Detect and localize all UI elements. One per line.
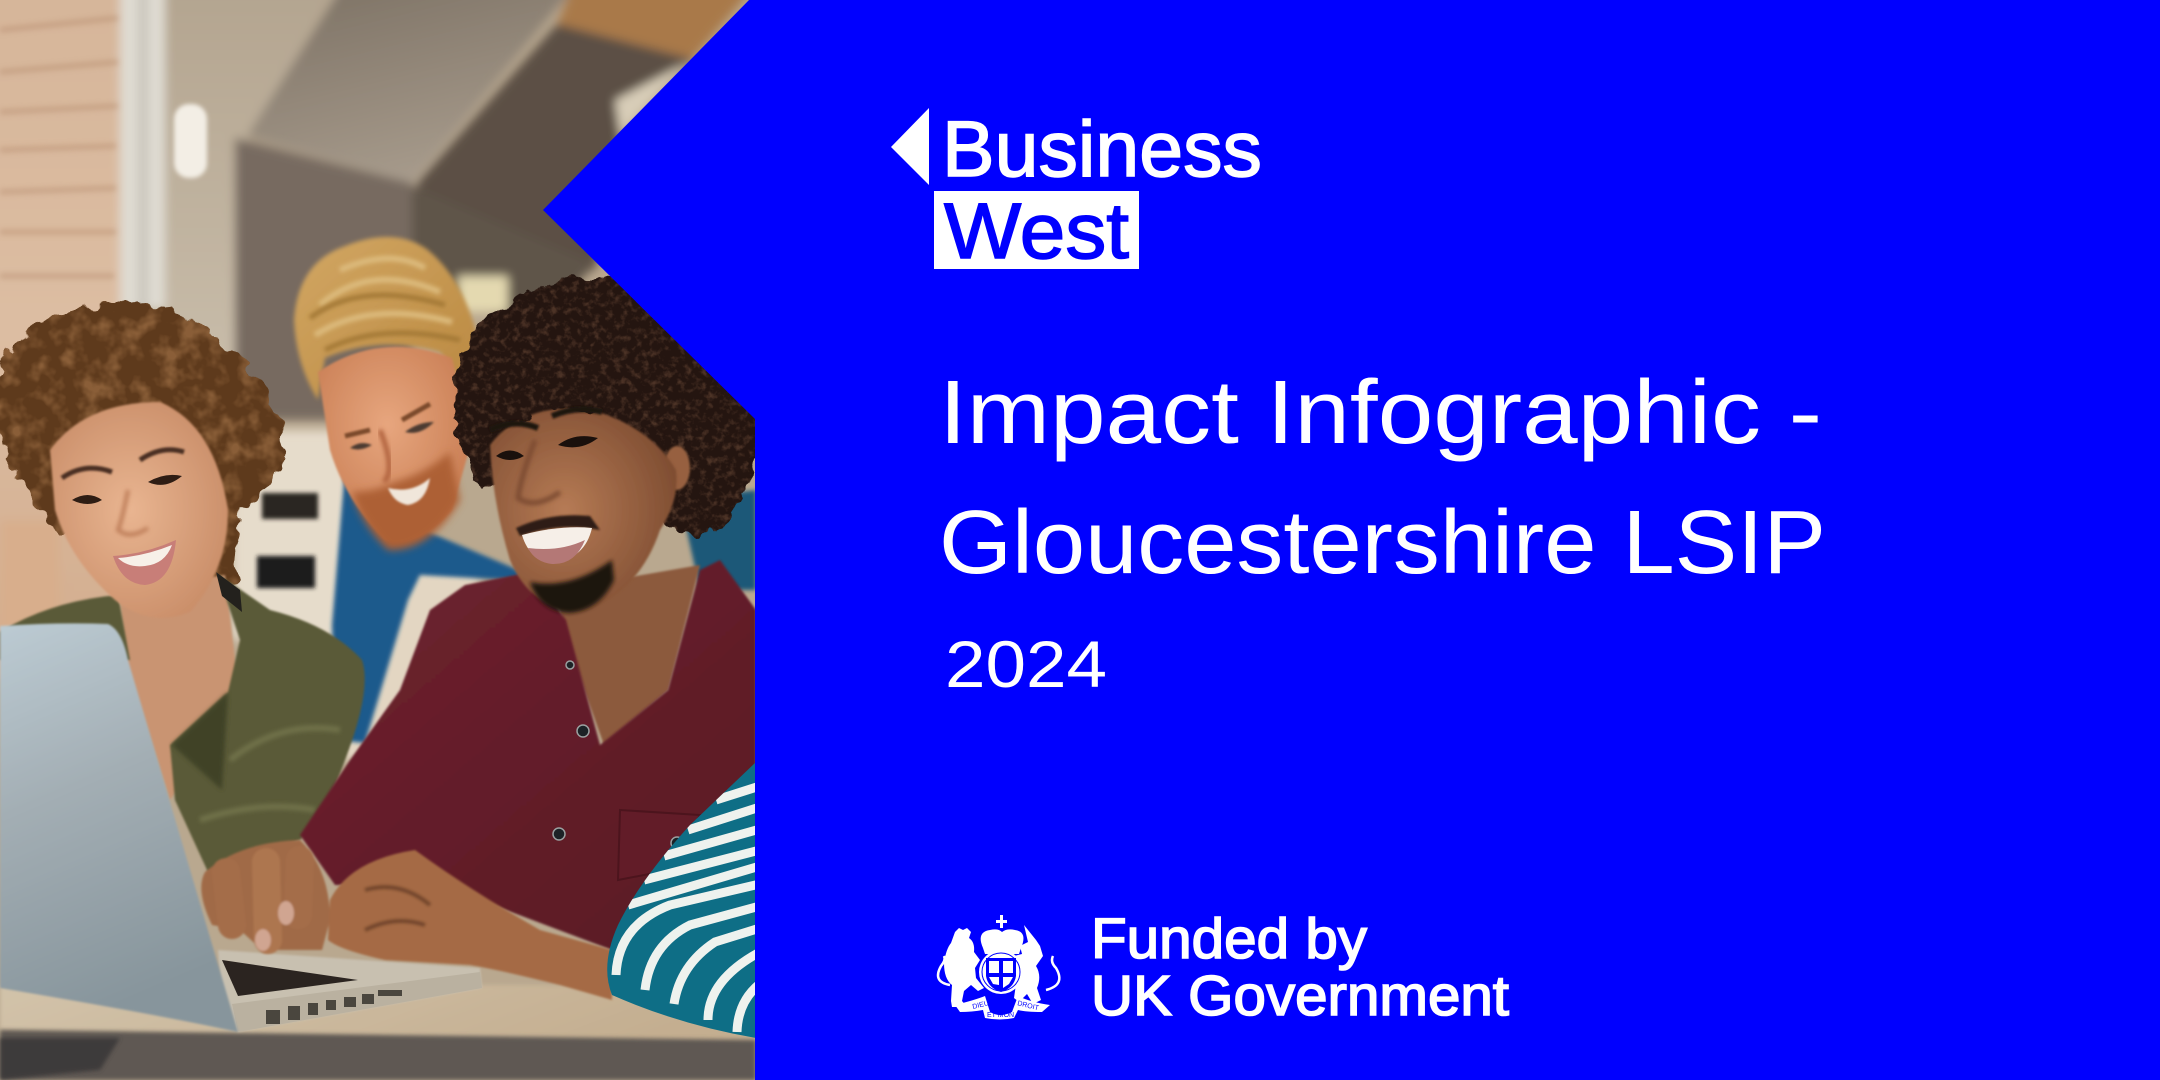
person: blond man [294, 237, 756, 743]
neck and chest [555, 565, 700, 745]
ear [664, 446, 690, 490]
brick courses [0, 18, 118, 276]
funder text: UK Government [1091, 964, 1509, 1028]
logo: Business West [891, 104, 1262, 275]
laptop [0, 623, 482, 1032]
shirt [0, 574, 365, 872]
hair fringe [490, 391, 665, 440]
eyes and brows [490, 409, 602, 430]
hair [454, 278, 738, 502]
beard [352, 452, 460, 550]
face [50, 402, 228, 618]
icon: royal coat of arms: DROIT [1017, 1000, 1040, 1012]
blue arrow panel cutting into the photo [543, 0, 2160, 1080]
table [0, 985, 760, 1080]
shirt buttons [553, 661, 683, 849]
title: Impact Infographic - [939, 363, 1822, 463]
laptop base and keyboard [218, 950, 482, 1032]
eyes and brows [62, 450, 184, 478]
crown [981, 915, 1023, 954]
icon: logo arrow [891, 108, 929, 185]
face [318, 347, 472, 541]
icon: wall lamp [174, 104, 207, 178]
motto ribbon [955, 996, 1050, 1020]
unicorn [1008, 925, 1043, 1004]
moustache, goatee and mouth [516, 515, 600, 536]
striped sleeve [607, 763, 755, 1038]
mouth [113, 540, 176, 585]
lion [944, 928, 984, 1007]
logo word: Business: Business [942, 104, 1262, 193]
person: man in maroon shirt [300, 278, 757, 950]
face [490, 408, 677, 612]
logo box: West: West [944, 186, 1129, 275]
year: 2024 [945, 627, 1107, 701]
icon: royal coat of arms [938, 915, 1059, 1020]
hair [0, 303, 285, 600]
title [939, 363, 1826, 593]
laptop lid [0, 623, 238, 1032]
blue shirt [332, 470, 530, 743]
funder text [1091, 907, 1509, 1028]
icon: royal coat of arms: DIEU [972, 1000, 990, 1011]
icon: royal coat of arms: ET MON [987, 1012, 1014, 1019]
shield [979, 950, 1023, 994]
shirt [300, 560, 756, 950]
neck [120, 575, 240, 800]
funder text: Funded by [1091, 907, 1368, 971]
hands on laptop [201, 840, 612, 1000]
photo: colleagues around a laptop [0, 0, 762, 1080]
title: Gloucestershire LSIP [939, 493, 1826, 593]
photo background: office interior [0, 0, 760, 1080]
hair [294, 237, 482, 405]
person: woman in olive shirt [0, 303, 365, 872]
eyes [345, 404, 430, 436]
